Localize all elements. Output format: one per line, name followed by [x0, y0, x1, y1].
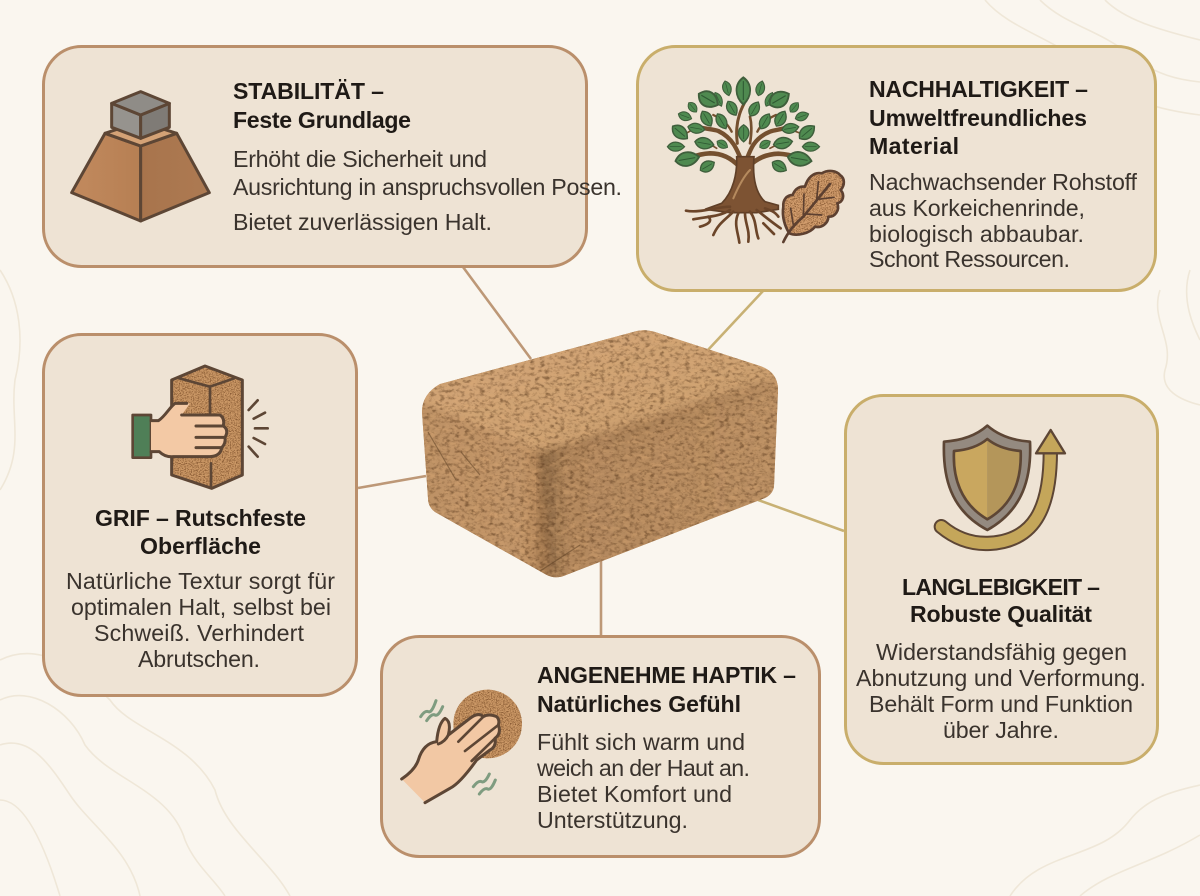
- body text: Bietet zuverlässigen Halt.: [233, 209, 492, 235]
- body text: Erhöht die Sicherheit und: [233, 146, 487, 172]
- icon: hand gripping cork block: [133, 365, 268, 490]
- icon: tree and oak leaf: [667, 77, 847, 243]
- body text: aus Korkeichenrinde,: [869, 195, 1085, 221]
- body text: Schont Ressourcen.: [869, 246, 1070, 272]
- body text: Nachwachsender Rohstoff: [869, 169, 1138, 195]
- body text: [869, 169, 1138, 272]
- heading: ANGENEHME HAPTIK –: [537, 662, 796, 688]
- body text: [66, 568, 335, 672]
- heading: [537, 662, 796, 717]
- panel: Grif: [44, 334, 356, 696]
- body text: Abrutschen.: [138, 646, 260, 672]
- cork block: [422, 330, 778, 578]
- body text: Fühlt sich warm und: [537, 729, 745, 755]
- body text: über Jahre.: [943, 717, 1059, 743]
- heading: Natürliches Gefühl: [537, 691, 741, 717]
- card: [638, 46, 1156, 290]
- body text: Ausrichtung in anspruchsvollen Posen.: [233, 174, 622, 200]
- body text: Bietet Komfort und: [537, 781, 732, 807]
- card: [44, 46, 586, 266]
- heading: LANGLEBIGKEIT –: [902, 574, 1100, 600]
- body text: Behält Form und Funktion: [869, 691, 1133, 717]
- heading: NACHHALTIGKEIT –: [869, 76, 1088, 102]
- body text: [856, 639, 1146, 743]
- card: [44, 334, 356, 696]
- heading: [233, 78, 411, 133]
- heading: Robuste Qualität: [910, 601, 1092, 627]
- heading: [95, 505, 306, 559]
- panel: Nachhaltigkeit: [638, 46, 1156, 290]
- heading: Oberfläche: [140, 533, 261, 559]
- icon: shield with arrow: [941, 426, 1065, 543]
- body text: biologisch abbaubar.: [869, 221, 1084, 247]
- connector lines: [358, 267, 844, 635]
- panel: Angenehme Haptik: [382, 636, 820, 856]
- heading: [902, 574, 1100, 627]
- body text: Natürliche Textur sorgt für: [66, 568, 335, 594]
- body text: [536, 729, 750, 833]
- heading: Feste Grundlage: [233, 107, 411, 133]
- heading: Umweltfreundliches: [869, 105, 1087, 131]
- body text: [233, 146, 622, 235]
- body text: Widerstandsfähig gegen: [876, 639, 1127, 665]
- body text: Unterstützung.: [537, 807, 688, 833]
- body text: weich an der Haut an.: [536, 755, 750, 781]
- panel: Langlebigkeit: [846, 396, 1158, 764]
- icon: block on pyramid: [72, 92, 209, 221]
- heading: STABILITÄT –: [233, 78, 384, 104]
- heading: GRIF – Rutschfeste: [95, 505, 306, 531]
- body text: optimalen Halt, selbst bei: [71, 594, 331, 620]
- body text: Schweiß. Verhindert: [94, 620, 305, 646]
- heading: Material: [869, 133, 959, 159]
- body text: Abnutzung und Verformung.: [856, 665, 1146, 691]
- card: [382, 636, 820, 856]
- heading: [869, 76, 1088, 159]
- panel: Stabilität: [44, 46, 622, 266]
- icon: hand touching cork: [402, 689, 522, 803]
- card: [846, 396, 1158, 764]
